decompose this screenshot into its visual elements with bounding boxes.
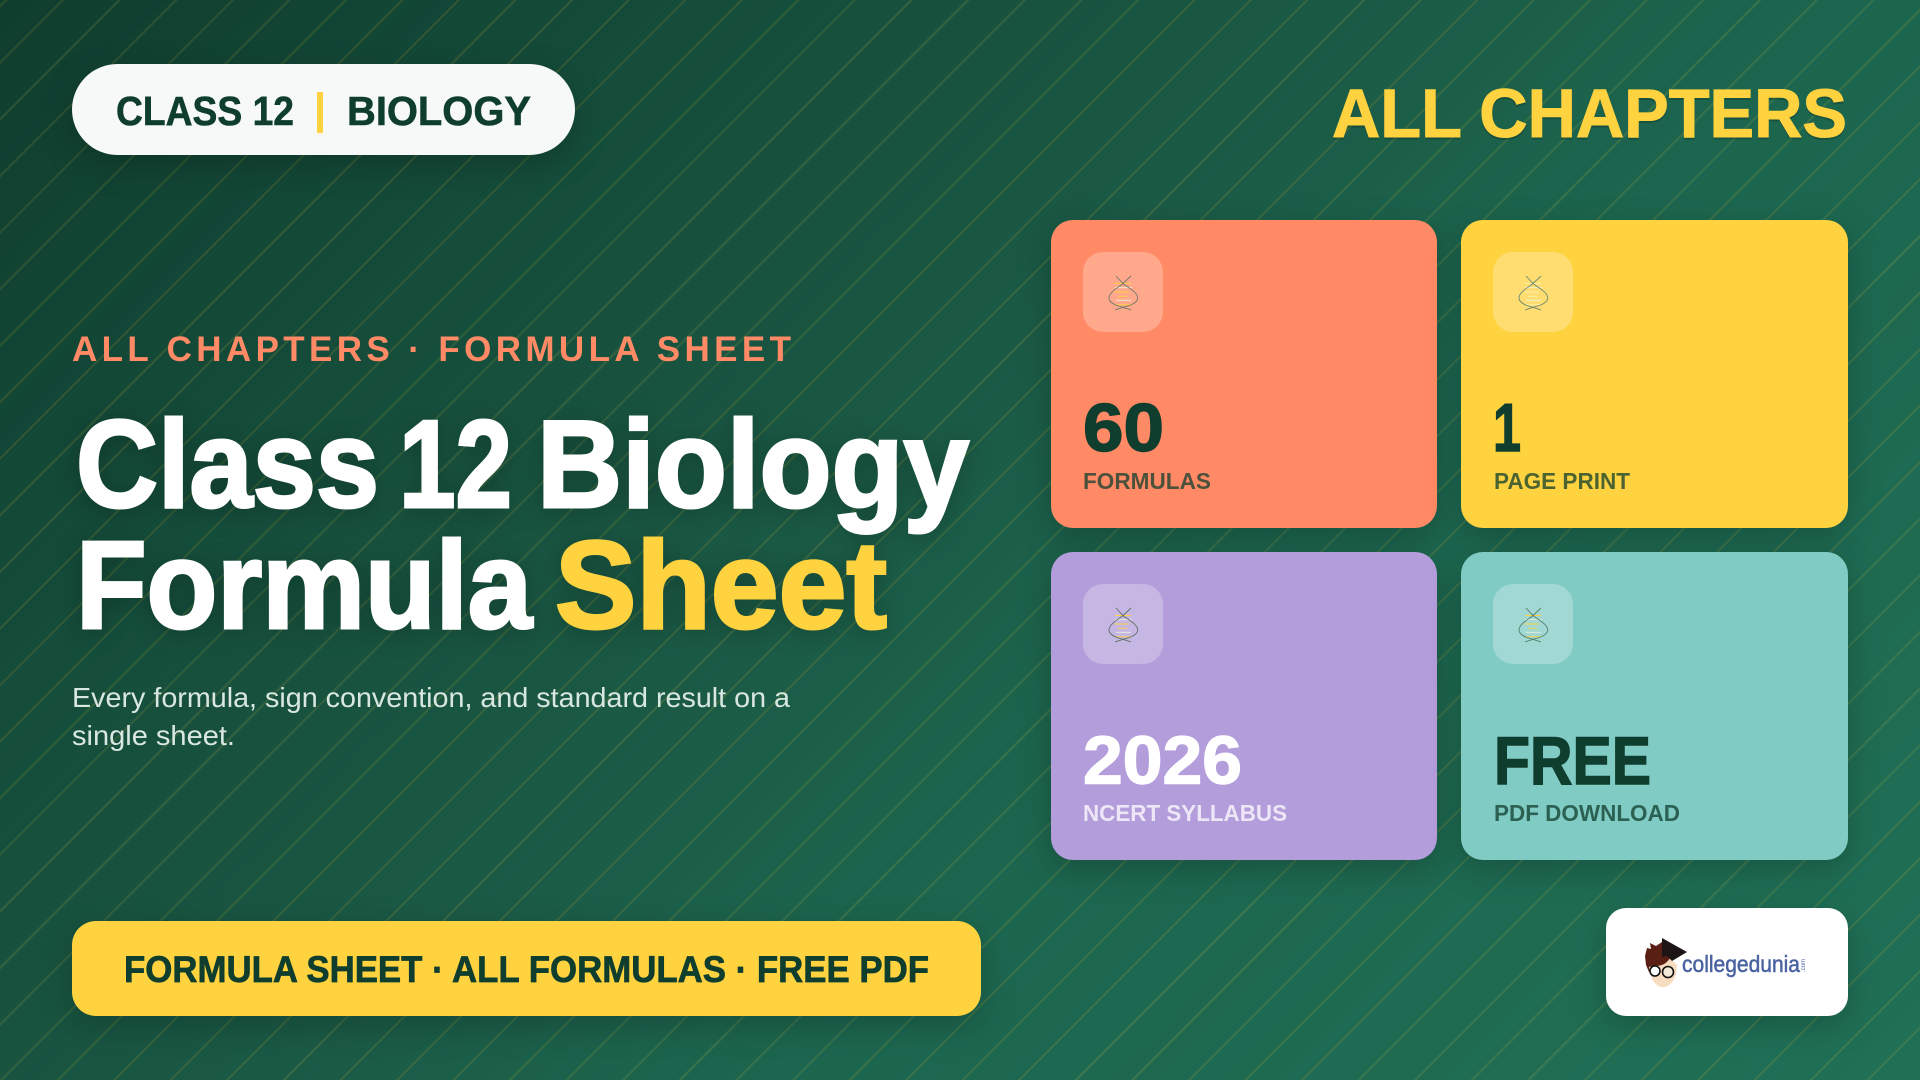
card: 2026 ncert syllabus [1051,552,1437,860]
stat value: FREE [1494,723,1651,799]
stat label: PDF DOWNLOAD [1494,800,1680,826]
subtitle [72,682,790,751]
subject pill [72,64,575,155]
call to action bar [72,921,981,1016]
stat value: 60 [1083,390,1164,466]
eyebrow text: ALL CHAPTERS · FORMULA SHEET [72,330,791,369]
icon: dna [1083,584,1163,664]
title line 1: Class [76,396,379,534]
call to action bar: FORMULA SHEET · ALL FORMULAS · FREE PDF [124,949,929,990]
stat value: 1 [1493,390,1521,466]
pill text: class: CLASS 12 [116,88,294,134]
stat label: FORMULAS [1083,468,1211,494]
title line 1: Biology [537,396,969,534]
card: 1 page print [1461,220,1848,528]
logo domain: .com [1801,959,1807,972]
subtitle: single sheet. [72,720,235,751]
title line 2: Formula [76,517,533,655]
main title [76,396,969,655]
subtitle: Every formula, sign convention, and standard result on a [72,682,790,713]
logo: collegedunia [1606,908,1848,1016]
logo wordmark: collegedunia [1682,951,1800,977]
stat label: NCERT SYLLABUS [1083,800,1287,826]
icon: dna [1493,252,1573,332]
icon: dna [1083,252,1163,332]
stat label: PAGE PRINT [1494,468,1630,494]
title line 1: 12 [399,396,512,534]
card: 60 formulas [1051,220,1437,528]
stat value: 2026 [1083,722,1242,798]
pill text: subject: BIOLOGY [347,88,531,134]
icon: dna [1493,584,1573,664]
pill divider [317,92,323,133]
title line 2: Sheet [555,517,887,655]
card: free pdf download [1461,552,1848,860]
top right heading: ALL CHAPTERS [1332,75,1847,152]
icon: student mascot [1645,938,1687,987]
